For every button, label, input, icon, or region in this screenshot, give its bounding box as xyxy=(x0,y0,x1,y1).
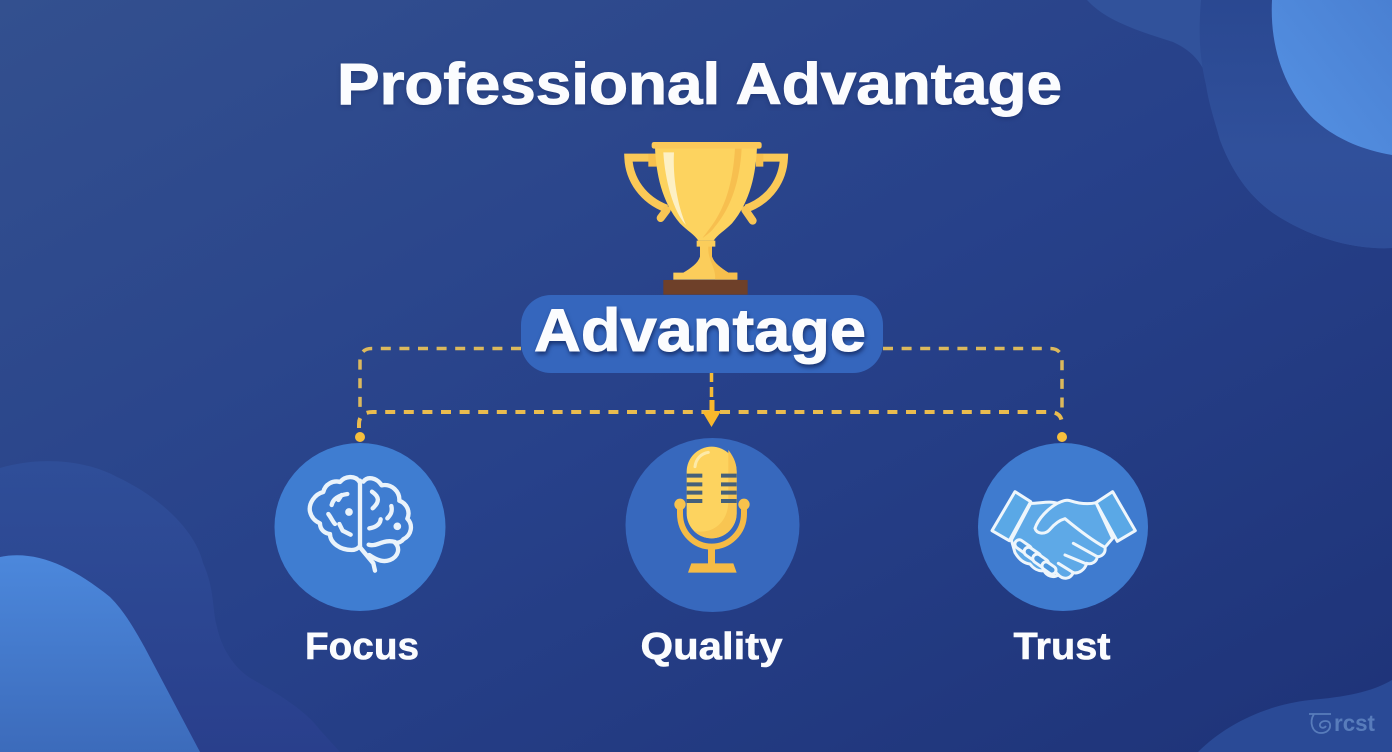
trophy bowl xyxy=(655,147,757,241)
icon: handshake xyxy=(992,492,1135,578)
item: Quality xyxy=(626,438,800,668)
connector: horizontal dashed line xyxy=(359,412,1062,428)
mic grille xyxy=(687,476,737,501)
connector dot: right xyxy=(1057,432,1067,442)
left cuff xyxy=(992,492,1031,541)
mic cradle xyxy=(680,504,744,547)
item: Trust xyxy=(978,443,1148,668)
trophy stem and base xyxy=(673,241,737,280)
watermark xyxy=(1309,710,1375,736)
label: Trust: Trust xyxy=(1014,626,1111,668)
title: Professional Advantage xyxy=(337,52,1062,117)
trophy highlight xyxy=(663,152,686,225)
item: Focus xyxy=(274,443,446,668)
connector: central dashed arrow xyxy=(702,372,721,427)
fingers xyxy=(1052,543,1097,575)
mic stand xyxy=(688,547,737,573)
quality circle xyxy=(626,438,800,612)
icon: brain xyxy=(310,477,411,571)
focus circle xyxy=(274,443,446,611)
connector dot: left xyxy=(355,432,365,442)
trophy right handle xyxy=(746,158,784,209)
icon: trophy xyxy=(628,142,784,295)
hands xyxy=(1011,500,1113,578)
trust circle xyxy=(978,443,1148,611)
central label: Advantage: Advantage xyxy=(534,297,866,364)
watermark: rcst xyxy=(1334,710,1375,736)
connector: top dashed bracket xyxy=(360,348,1062,411)
trophy rim xyxy=(652,142,762,149)
decorative blob: bottom right xyxy=(1198,680,1392,752)
mic head xyxy=(687,447,737,538)
trophy plinth xyxy=(663,280,748,295)
label: Focus: Focus xyxy=(305,626,419,668)
decorative blob: top right xyxy=(1087,0,1392,248)
right cuff xyxy=(1096,492,1135,541)
decorative blob: bottom left xyxy=(0,461,340,752)
trophy left handle xyxy=(628,158,667,209)
icon: microphone xyxy=(674,447,750,573)
label: Quality: Quality xyxy=(640,626,782,668)
